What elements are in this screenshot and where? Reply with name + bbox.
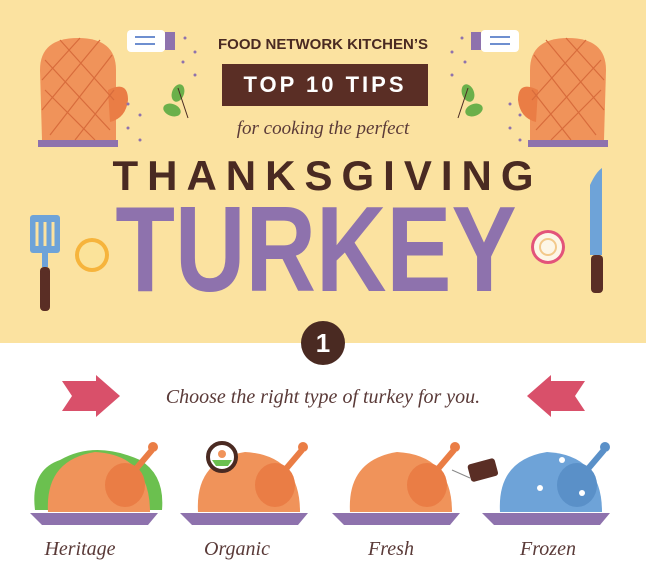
subtitle: food network kitchen's: FOOD NETWORK KITCHEN’S (218, 36, 428, 53)
step number badge: 1 (316, 328, 330, 358)
turkey: heritage (30, 442, 162, 525)
banner: top 10 tips (222, 64, 428, 106)
label: organic: Organic (204, 538, 270, 560)
icon: right salt shaker (471, 30, 519, 52)
step text: Choose the right type of turkey for you. (166, 386, 480, 408)
icon: left herb (161, 82, 188, 119)
turkey: organic (180, 442, 308, 525)
arrow: right pink (527, 375, 585, 417)
icon: left oven mitt (38, 38, 128, 147)
heading: turkey: TURKEY (115, 181, 517, 317)
icon: right herb (458, 82, 485, 119)
arrow: left pink (62, 375, 120, 417)
decorations svg (30, 30, 608, 311)
tagline: for cooking the perfect (237, 118, 409, 139)
salt dots (126, 36, 522, 142)
icon: spatula (30, 215, 60, 311)
heading: thanksgiving: THANKSGIVING (112, 152, 542, 199)
icon: right oven mitt (518, 38, 608, 147)
icon: lemon slice (75, 238, 109, 272)
banner: top 10 tips: TOP 10 TIPS (243, 72, 407, 97)
turkey: frozen (482, 442, 610, 525)
label: heritage: Heritage (44, 538, 116, 560)
label: fresh: Fresh (368, 538, 414, 560)
turkey illustrations (30, 441, 610, 525)
turkey: fresh (332, 442, 499, 525)
icon: onion slice (531, 230, 565, 264)
label: frozen: Frozen (520, 538, 576, 560)
icon: left salt shaker (127, 30, 175, 52)
header background (0, 0, 646, 343)
step number badge (301, 321, 345, 365)
icon: knife (590, 168, 603, 293)
